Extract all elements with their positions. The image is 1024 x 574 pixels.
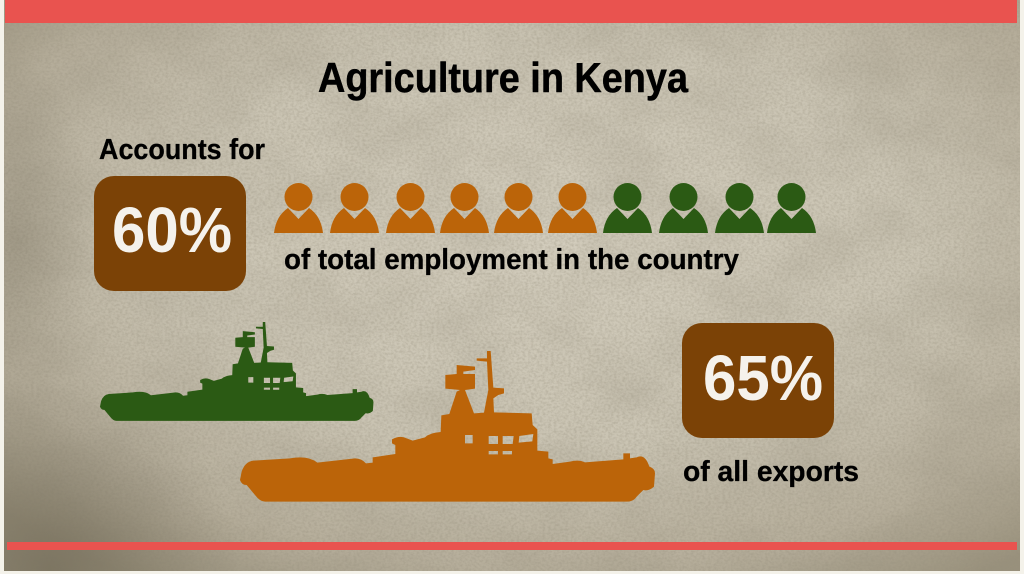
stat box: 60%: 60% xyxy=(112,194,232,266)
person 10 xyxy=(767,183,816,233)
stat box: 60% xyxy=(94,176,246,291)
title: Agriculture in Kenya xyxy=(318,54,689,101)
top red bar xyxy=(5,0,1017,23)
person 8 xyxy=(659,183,708,233)
stat box: 65% xyxy=(682,323,834,438)
person 5 xyxy=(494,183,543,233)
icon: orange ship xyxy=(240,351,655,502)
label: of total employment: of total employment in the country xyxy=(284,244,739,276)
person 6 xyxy=(548,183,597,233)
person 2 xyxy=(330,183,379,233)
person 7 xyxy=(603,183,652,233)
people pictogram: 6 of 10 highlighted xyxy=(274,183,816,233)
label: accounts for: Accounts for xyxy=(99,134,265,166)
person 9 xyxy=(715,183,764,233)
person 3 xyxy=(386,183,435,233)
person 1 xyxy=(274,183,323,233)
person 4 xyxy=(440,183,489,233)
bottom red bar xyxy=(7,542,1017,550)
label: of all exports: of all exports xyxy=(683,456,859,488)
stat box: 65%: 65% xyxy=(703,342,823,414)
icon: green ship xyxy=(100,322,373,421)
